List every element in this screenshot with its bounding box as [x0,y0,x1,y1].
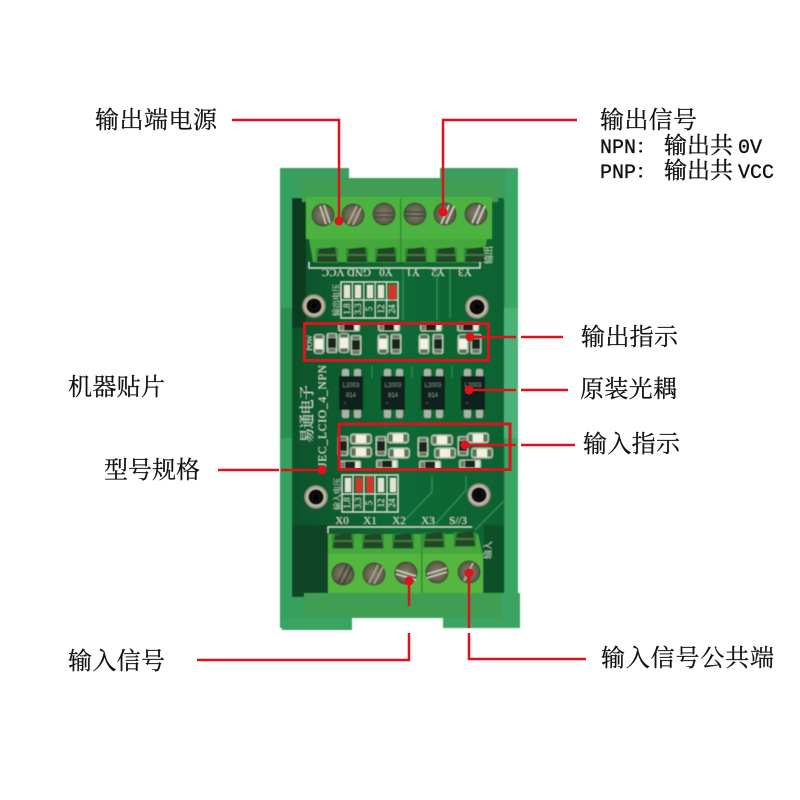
input voltage selector: 5 [364,500,374,505]
callout: output signal [438,100,774,216]
output voltage selector [331,282,398,318]
callout: output signal: VCC [738,162,774,185]
optocouplers: L2003 [465,383,482,389]
callout: input signal: 输入信号 [68,641,165,676]
board silkscreen model text: 易通电子 [296,385,317,443]
output indicator components: POW [306,335,314,351]
bottom terminal labels: X1 [363,515,377,527]
top rail lip [302,178,498,202]
optocouplers: L2003 [425,383,442,389]
label: machine SMT: 机器贴片 [68,367,165,402]
optocouplers: 814 [346,393,357,399]
output voltage selector: 24 [387,304,397,314]
callout: original optocoupler [464,369,677,404]
optocouplers: 814 [428,393,439,399]
output voltage selector: 12 [376,304,386,314]
callout: model specification [104,450,326,485]
bottom terminal labels: X2 [392,515,406,527]
callout: output signal: NPN： [600,137,656,160]
bottom terminal labels [328,515,493,559]
red highlight box: input indicators [339,424,510,470]
callout: output signal: 输出共 [664,127,733,160]
input voltage selector [332,475,398,512]
product photo: PCB module on DIN rail [280,168,520,630]
bottom rail bar and feet [282,593,520,630]
callout: original optocoupler: 原装光耦 [580,369,677,404]
top terminal labels: 输出 [483,246,494,264]
output voltage selector: 输出电压 [331,284,341,316]
board silkscreen model text [296,364,329,467]
top terminal labels: Y0 [379,266,393,278]
callout: model specification: 型号规格 [104,450,200,485]
bottom terminal labels: 输入 [482,541,493,559]
bottom terminal block [328,531,483,596]
circuit board [292,198,505,598]
callout: output signal: 输出信号 [600,100,697,135]
board silkscreen model text: JEC_LCIO_4_NPN [317,364,329,467]
mounting holes [302,294,491,509]
bottom terminal labels: X0 [335,515,349,527]
callout: input signal common: 输入信号公共端 [601,638,774,673]
bottom terminal labels: S//3 [449,515,467,527]
top terminal block [306,197,492,263]
red highlight box: output indicators [304,324,488,360]
top terminal labels: VCC [322,266,344,278]
callout: input signal common [464,568,774,673]
input voltage selector: 24 [387,498,397,508]
output voltage selector: 3.3 [353,303,363,315]
optocouplers: L2003 [343,383,360,389]
callout: input signal [68,576,414,676]
DIN rail housing [280,168,518,628]
input voltage selector: 3.3 [353,497,363,509]
input voltage selector: 1.8 [342,497,352,509]
input voltage selector: 输入电压 [332,478,342,510]
output voltage selector: 1.8 [342,303,352,315]
optocouplers [339,369,485,418]
top terminal labels [309,246,494,278]
callout: input indicator: 输入指示 [583,424,681,459]
callout: output indicator: 输出指示 [581,317,679,352]
top terminal labels: GND [347,266,371,278]
callout: output power: 输出端电源 [95,100,218,135]
callout: output indicator [466,317,679,352]
output indicator components [306,322,482,355]
callout: output signal: PNP： [600,162,656,185]
input voltage selector: 12 [376,498,386,508]
optocouplers: L2003 [385,383,402,389]
input indicator components [338,432,493,470]
top terminal labels: Y1 [406,266,420,278]
output voltage selector: 5 [364,306,374,311]
callout: input indicator [460,424,681,459]
optocouplers: 814 [388,393,399,399]
top terminal labels: Y2 [431,266,445,278]
bottom terminal labels: X3 [421,515,435,527]
top terminal labels: Y3 [458,266,472,278]
callout: output signal: 0V [738,137,762,160]
callout: output signal: 输出共 [664,152,733,185]
callout: output power [95,100,344,226]
